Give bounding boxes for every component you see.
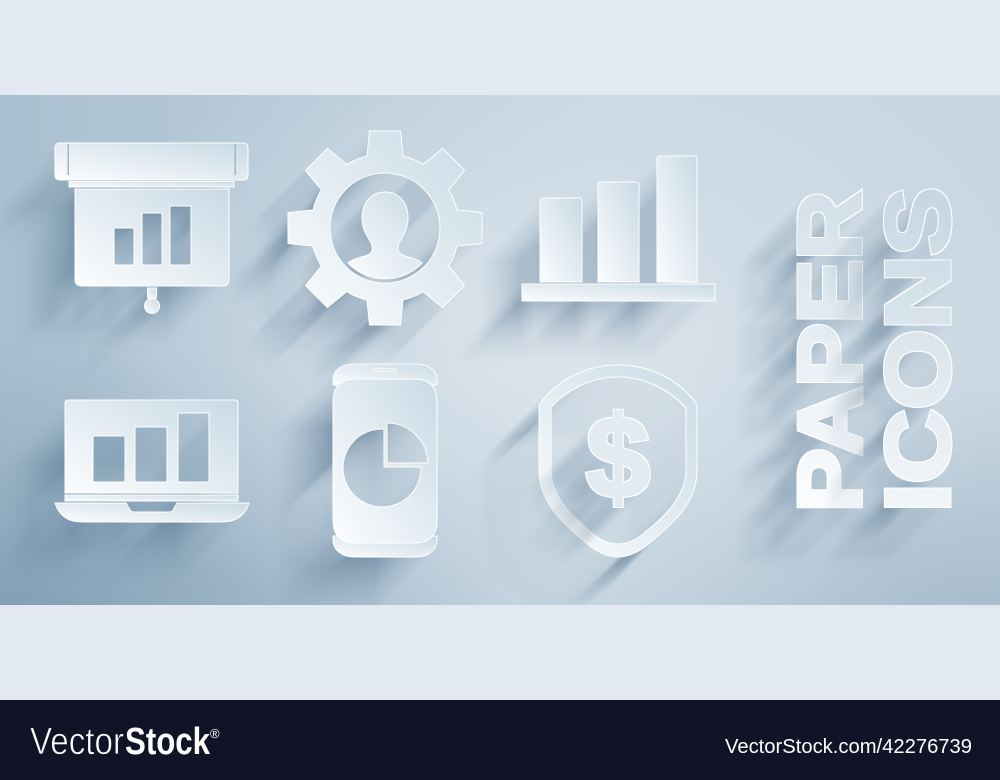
- projector knob: [144, 298, 160, 314]
- gear ring: [288, 131, 482, 325]
- icon: gear with person: [288, 131, 482, 325]
- dollar sign: $: [586, 394, 650, 522]
- shield outline: [539, 365, 697, 557]
- bar 3: [657, 156, 697, 282]
- logo word: Stock: Stock: [125, 721, 211, 763]
- projector roller left slit: [68, 144, 69, 175]
- phone top piece: [333, 364, 437, 385]
- projector bracket strip: [69, 182, 234, 187]
- projector roller right slit: [234, 144, 236, 175]
- vertical heading: ICONS: ICONS: [868, 187, 969, 512]
- person silhouette: [348, 192, 422, 279]
- VectorStock logo: [30, 721, 220, 763]
- bar 2: [598, 182, 639, 282]
- phone bottom piece: [333, 536, 437, 557]
- projection screen with bar holes: [75, 189, 229, 286]
- registered mark: ®: [210, 726, 220, 741]
- laptop screen with bar holes: [65, 400, 238, 493]
- projector roller bar: [55, 143, 248, 180]
- projector stem: [148, 288, 156, 298]
- icon: smartphone with pie chart: [333, 364, 437, 557]
- grey-blue paper background panel: [0, 95, 1000, 605]
- icon: bar chart on shelf: [522, 156, 715, 301]
- chart base: [522, 284, 715, 301]
- icon: projector screen with bar chart: [55, 143, 248, 314]
- vertical heading: PAPER: PAPER: [780, 191, 880, 512]
- footer bar: [0, 700, 1000, 780]
- image id caption: VectorStock.com/42276739: [725, 736, 972, 758]
- bar 1: [540, 198, 582, 282]
- logo word: Vector: Vector: [30, 721, 124, 763]
- icon: shield with dollar sign: [539, 365, 697, 557]
- laptop hinge strip: [65, 495, 238, 501]
- laptop base: [55, 503, 249, 522]
- icon: laptop with bar chart: [55, 400, 249, 522]
- phone body with pie chart holes: [333, 379, 437, 543]
- phone speaker: [373, 369, 396, 371]
